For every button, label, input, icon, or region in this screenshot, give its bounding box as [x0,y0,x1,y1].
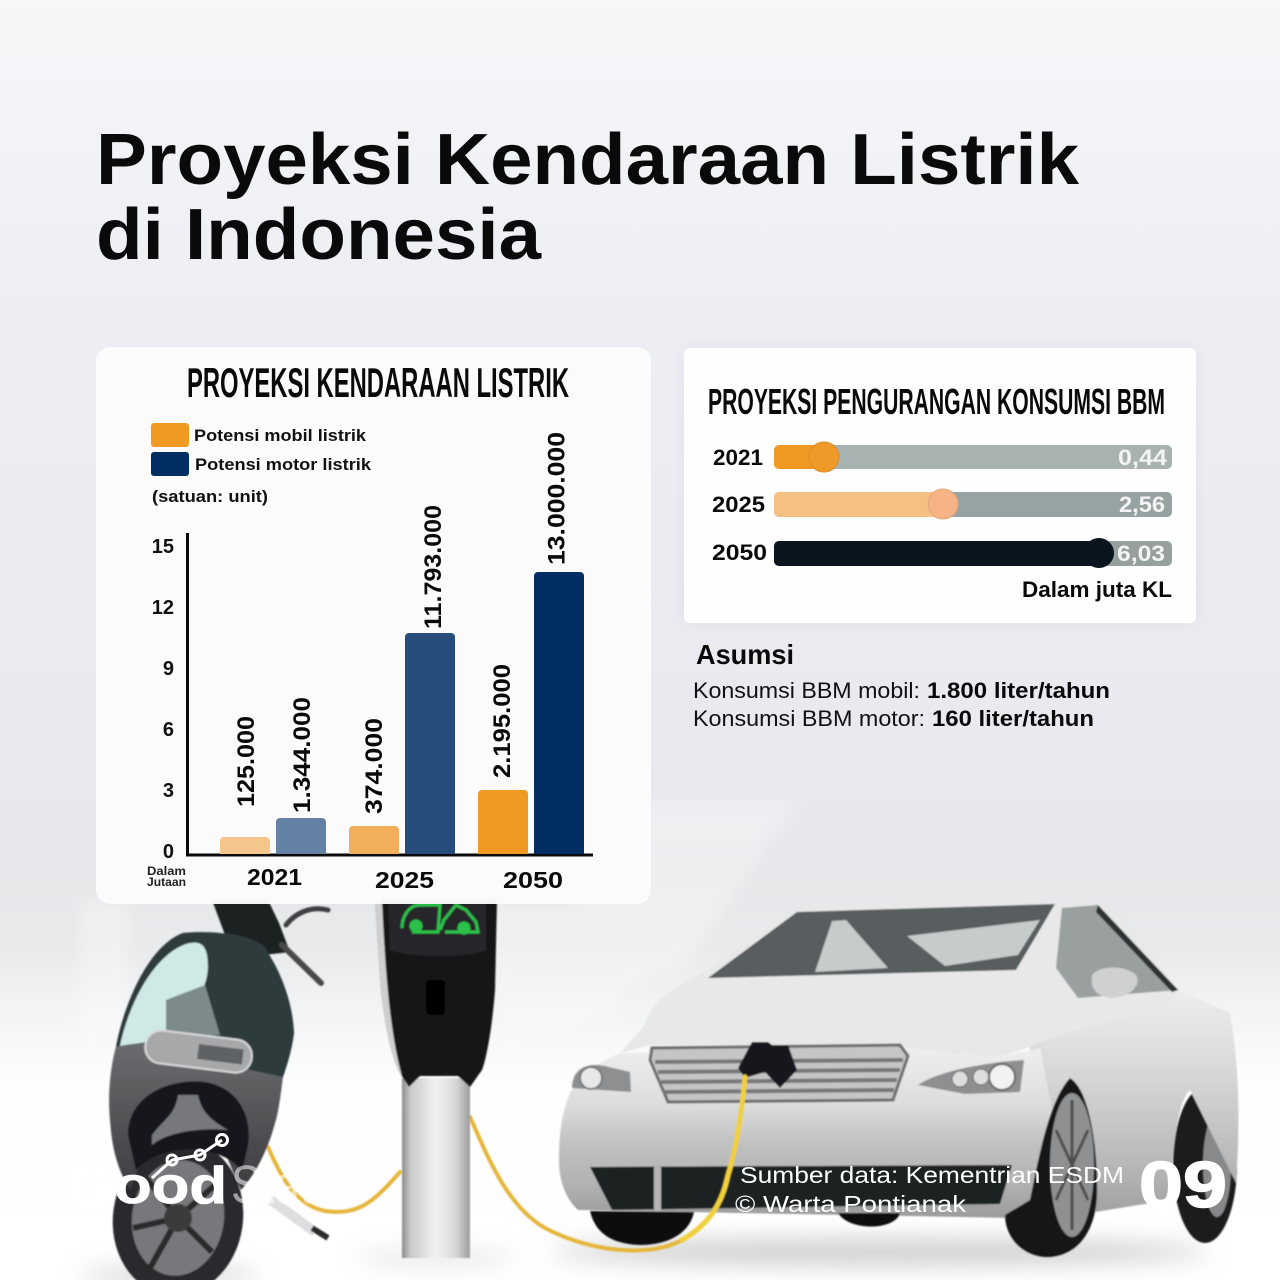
front right wheel [1005,1078,1097,1257]
y axis labels: 9 [163,658,174,680]
legend: Potensi motor listrik [195,455,372,474]
slider 2025: 2025 [712,492,765,517]
scooter kickstand [271,1200,328,1238]
illustration: ground shadows [80,1240,1210,1280]
windshield [708,904,1055,978]
bar values: 374.000 [361,718,388,814]
station screen [388,900,486,956]
assumptions text [693,639,1110,731]
scooter windshield [116,932,294,1077]
slider 2021: 0,44 [1118,445,1168,470]
bar values: 125.000 [233,716,260,807]
source credit: © Warta Pontianak [735,1191,967,1217]
legend [151,423,372,506]
unit note [147,866,186,889]
year labels: 2025 [375,867,434,893]
illustration: charging cables [268,1117,682,1250]
logo [66,1134,336,1215]
background: faint city streaks [80,800,800,1040]
illustration: scooter [103,900,328,1280]
unit label: Dalam juta KL [1022,577,1172,602]
slider 2050 [712,538,1172,568]
windshield panes [815,920,1040,972]
y axis labels: 12 [152,597,174,619]
station car icon [402,905,478,933]
y axis labels [152,536,174,863]
bar values: 11.793.000 [420,505,447,629]
illustration: charging station [375,900,497,1258]
station pole [402,1078,470,1258]
title: di Indonesia [96,195,542,275]
assumptions text: Konsumsi BBM motor: [693,706,925,731]
unit note: Dalam [147,866,186,878]
front underside [590,1211,900,1245]
bar values: 13.000.000 [544,432,570,565]
rear wheel [1173,1087,1237,1243]
car front bumper [559,1046,1060,1218]
station port [426,980,445,1015]
legend: Potensi mobil listrik [194,426,367,445]
bar values: 2.195.000 [489,664,516,778]
illustration: car [559,899,1238,1257]
y axis labels: 6 [163,719,174,741]
car charging cable [682,1077,745,1240]
scooter badge [143,1029,254,1074]
logo wordmark: Good [66,1157,227,1215]
lower air intake [590,1165,1012,1210]
y axis labels: 3 [163,780,174,802]
assumptions text: 1.800 liter/tahun [927,678,1110,703]
unit note: Jutaan [147,877,186,889]
title [96,120,1080,275]
source credit [735,1162,1124,1217]
charging connector [738,1042,797,1088]
y axis labels: 0 [163,841,174,863]
year labels: 2050 [503,867,563,893]
bar values [233,432,570,814]
assumptions text: Konsumsi BBM mobil: [693,678,920,703]
assumptions text: 160 liter/tahun [932,706,1094,731]
legend: (satuan: unit) [152,487,268,506]
slider 2050: 2050 [712,540,767,565]
assumptions text: Asumsi [696,639,794,670]
car mirror [1092,968,1138,998]
car side body [1030,985,1238,1218]
scooter fender arch [128,1081,249,1172]
headlights [572,1060,1024,1094]
panel: vehicle projection chart [96,347,651,904]
bars [220,572,584,854]
page number: 09 [1139,1148,1227,1221]
year labels [247,864,563,893]
slider 2021: 2021 [713,445,763,470]
source credit: Sumber data: Kementrian ESDM [740,1162,1124,1188]
station head [375,900,497,1087]
y axis labels: 15 [152,536,174,558]
slider 2025: 2,56 [1119,492,1165,517]
scooter shield [109,932,294,1190]
chart heading: PROYEKSI KENDARAAN LISTRIK [187,359,569,406]
car roof and hood [620,899,1178,1057]
logo: Stats [231,1155,336,1215]
title: Proyeksi Kendaraan Listrik [96,120,1080,200]
slider 2025 [712,489,1172,519]
logo chart icon [152,1134,228,1178]
windshield reflection [120,943,208,1046]
year labels: 2021 [247,864,302,890]
bar values: 1.344.000 [289,697,316,813]
slider 2050: 6,03 [1117,541,1165,566]
scooter neck and handlebar [212,900,328,983]
axes [188,533,593,855]
slider 2021 [713,442,1172,472]
side window [1056,905,1178,998]
panel: fuel reduction [684,348,1196,623]
car grille [650,1045,908,1102]
scooter front wheel [103,1132,253,1280]
